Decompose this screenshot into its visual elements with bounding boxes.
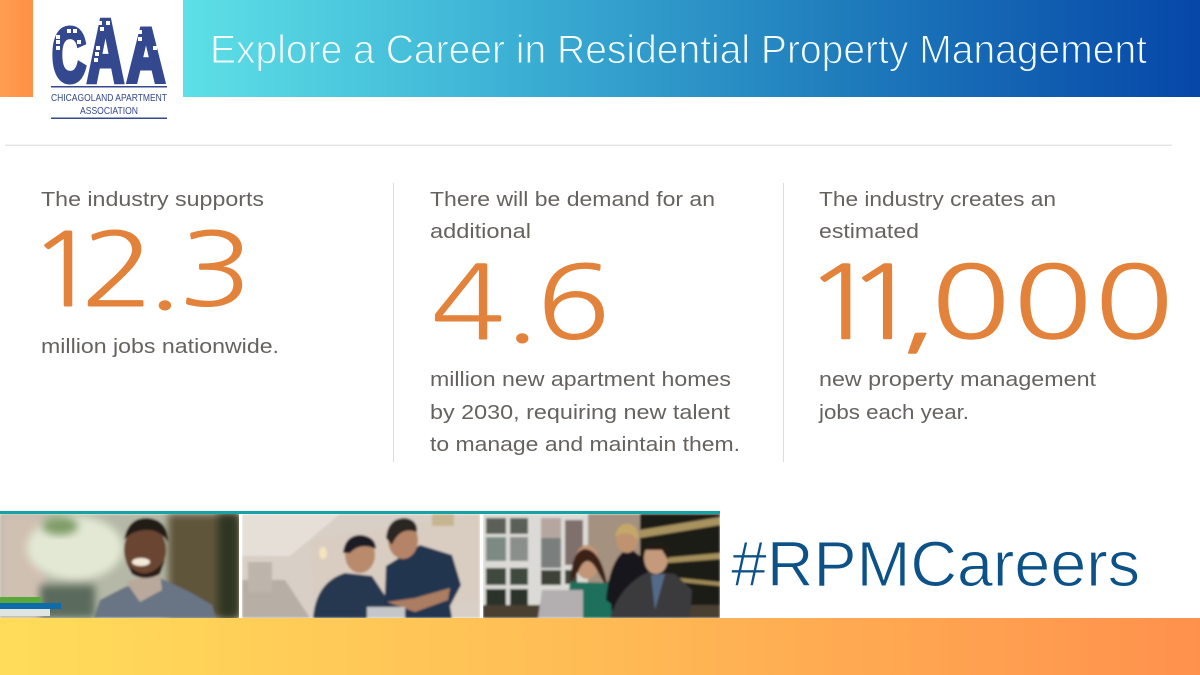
footer gradient band <box>0 618 1200 675</box>
panel: 11,000 new jobs: jobs each year. <box>818 401 969 424</box>
panel: 12.3 million jobs: The industry supports <box>41 188 264 211</box>
panel: 11,000 new jobs <box>801 188 1174 424</box>
panel: 12.3 million jobs: million jobs nationwide. <box>41 335 279 358</box>
logo: Chicagoland Apartment Association: ASSOCIATION <box>80 105 138 117</box>
photo: smiling man outdoors <box>0 514 239 618</box>
panel: 11,000 new jobs: estimated <box>819 220 919 243</box>
panel: 11,000 new jobs: The industry creates an <box>819 188 1056 211</box>
logo: Chicagoland Apartment Association <box>51 0 167 119</box>
logo: Chicagoland Apartment Association: C <box>52 14 86 98</box>
photo: two maintenance workers with tablet <box>242 514 480 618</box>
teal rule above photos <box>0 511 720 514</box>
stat: 12.3: 12.3 <box>27 220 253 321</box>
stat: 4.6: 4.6 <box>431 252 611 354</box>
panel: 4.6 million new homes: million new apartment homes <box>430 368 731 391</box>
panel: 11,000 new jobs: new property management <box>819 368 1096 391</box>
hashtag: #RPMCareers <box>731 528 1140 600</box>
panel: 12.3 million jobs <box>27 188 279 358</box>
logo: Chicagoland Apartment Association: CHICAGOLAND APARTMENT <box>51 92 167 104</box>
photo: three office staff with laptop <box>483 514 720 618</box>
panel: 4.6 million new homes: by 2030, requiring new talent <box>430 401 730 424</box>
title: Explore a Career in Residential Property Management <box>210 28 1147 72</box>
panel: 4.6 million new homes: to manage and maintain them. <box>430 433 740 456</box>
header banner <box>0 0 1200 97</box>
panel: 4.6 million new homes: There will be demand for an <box>430 188 715 211</box>
panel: 4.6 million new homes: additional <box>430 220 531 243</box>
panel: 4.6 million new homes <box>430 188 740 456</box>
logo: Chicagoland Apartment Association: A <box>87 0 124 100</box>
stat: 11,000: 11,000 <box>801 253 1174 354</box>
logo: Chicagoland Apartment Association: A <box>127 14 165 98</box>
